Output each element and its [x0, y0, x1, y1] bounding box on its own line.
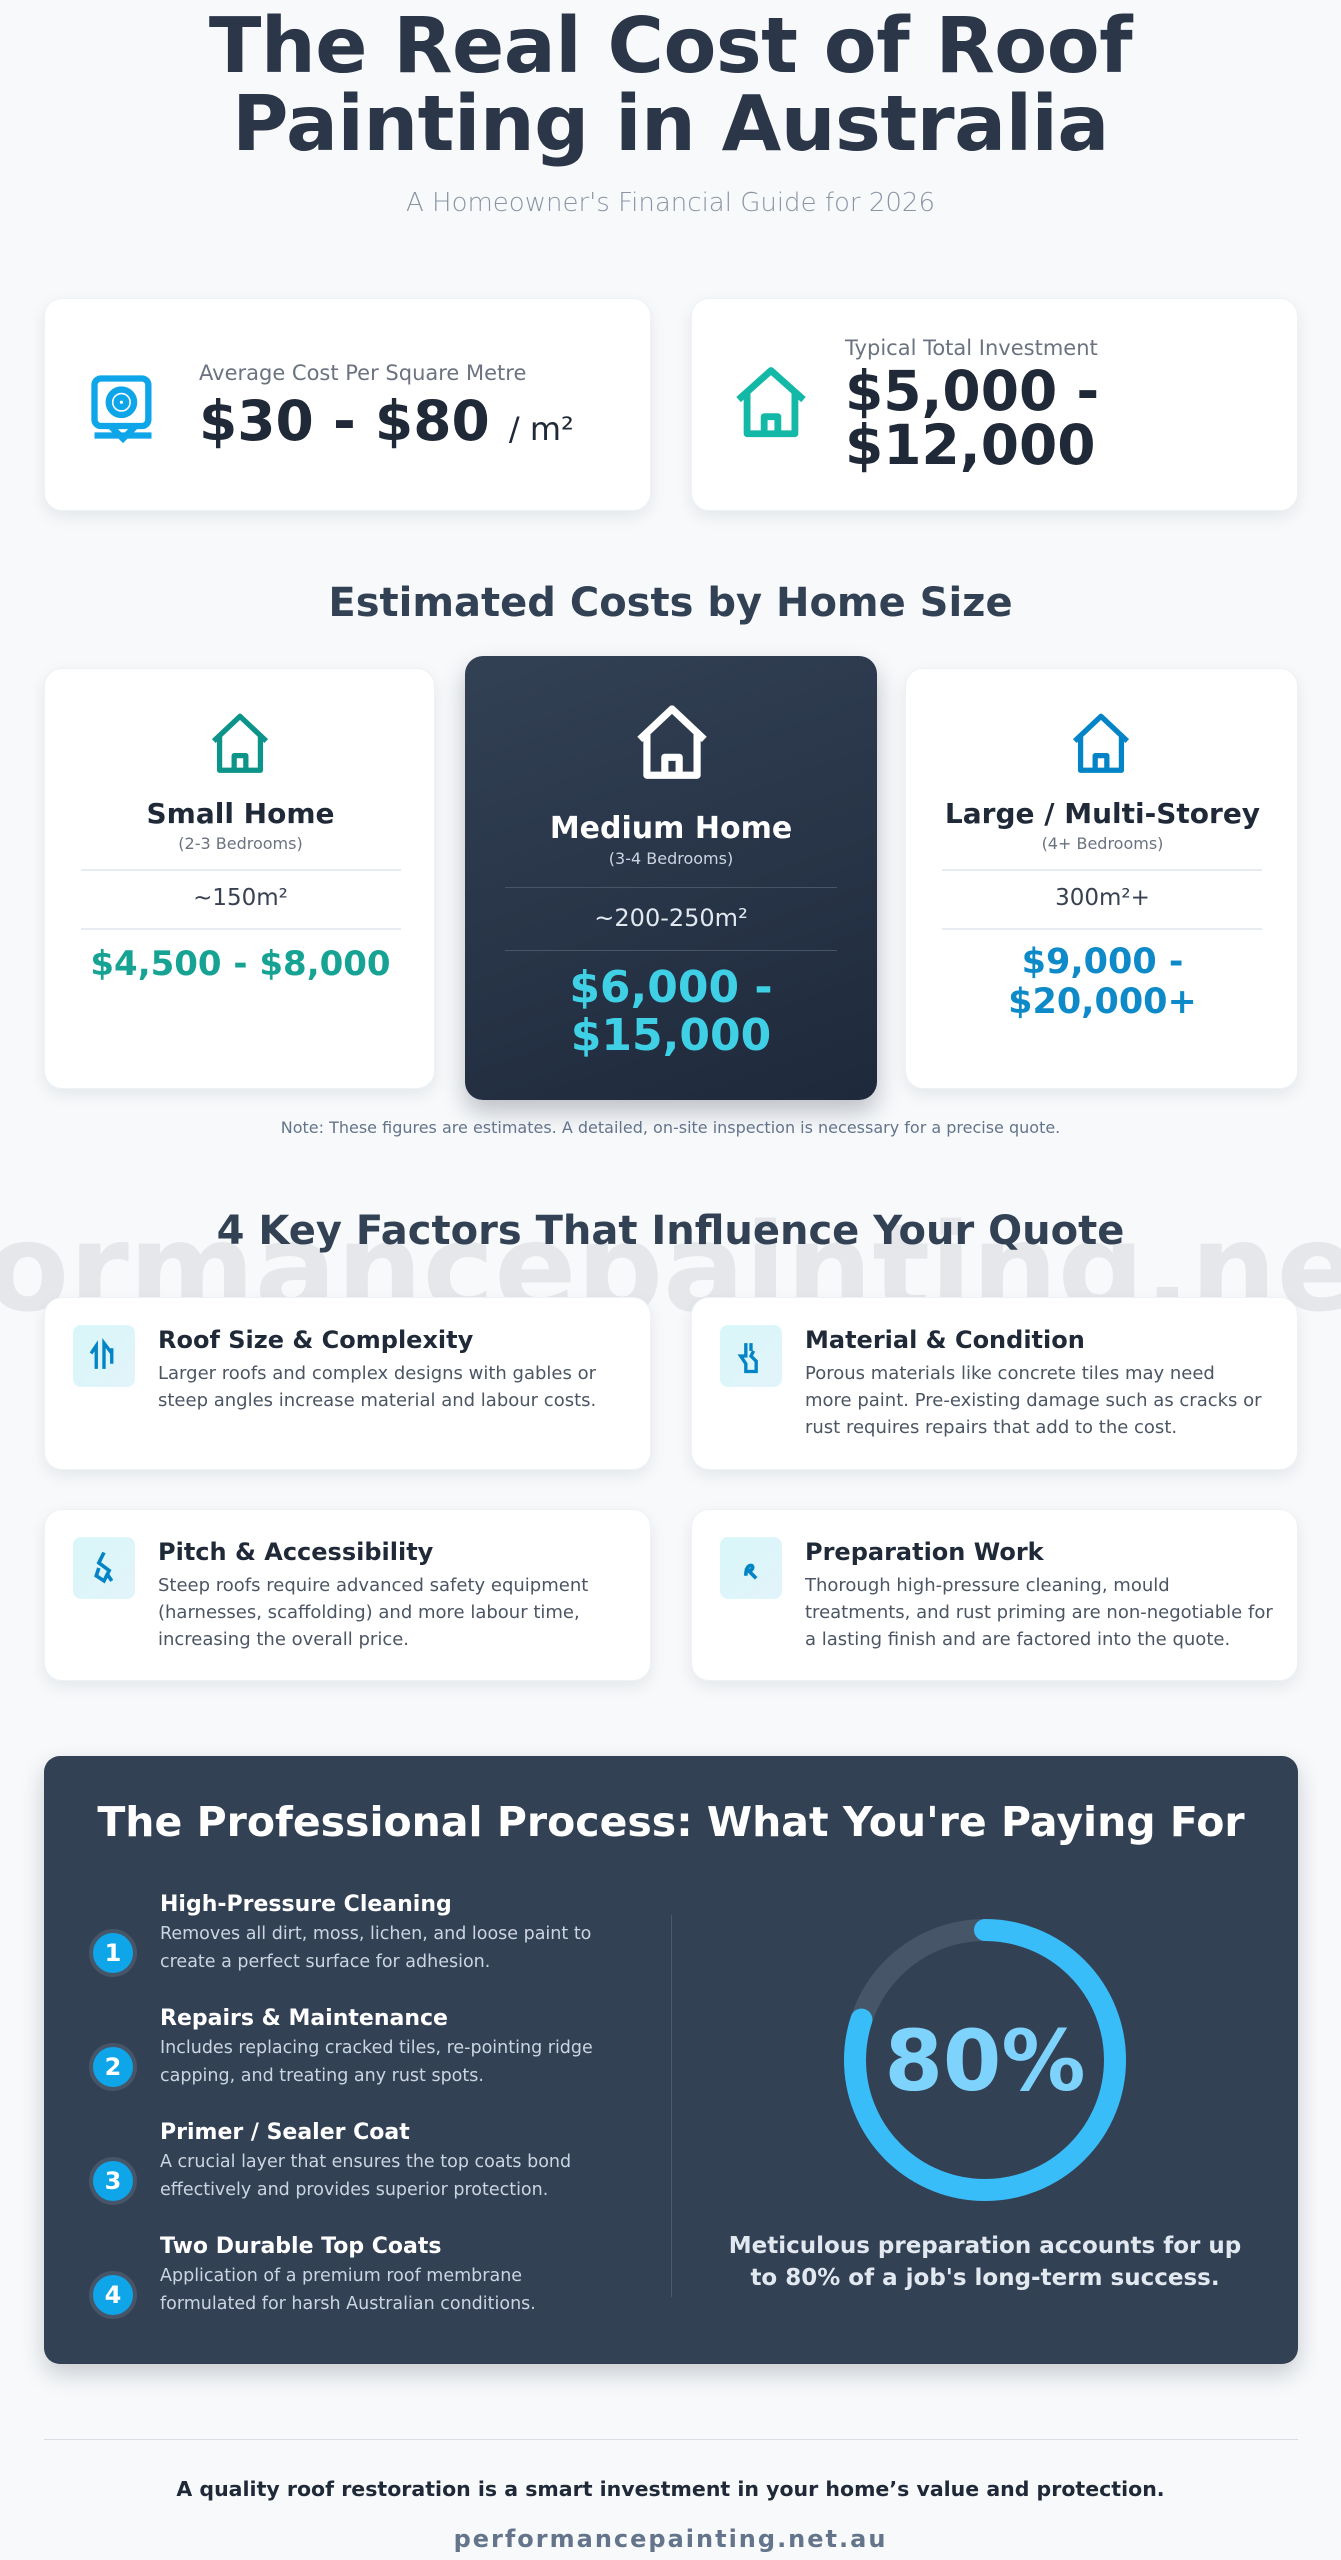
step 4: formulated for harsh Australian conditions.: [160, 2294, 536, 2314]
icon: [637, 705, 707, 779]
subtitle: A Homeowner's Financial Guide for 2026: [406, 188, 935, 218]
price: $4,500 - $8,000: [90, 944, 391, 984]
title: Small Home: [146, 797, 334, 830]
title: The Real Cost of Roof: [209, 2, 1132, 91]
card: large home: [905, 668, 1298, 1089]
label: Typical Total Investment: [845, 336, 1098, 360]
heading: estimated costs: Estimated Costs by Home Size: [328, 580, 1013, 626]
step 4: 4: [105, 2281, 121, 2309]
factor: roof size: Larger roofs and complex designs with gables or steep angles increase material and labour costs.: [158, 1363, 596, 1411]
icon: house: [736, 367, 806, 438]
step 3: effectively and provides superior protection.: [160, 2180, 548, 2200]
caption: to 80% of a job's long-term success.: [750, 2265, 1220, 2291]
caption: Meticulous preparation accounts for up: [729, 2233, 1241, 2259]
factor: preparation: treatments, and rust priming are non-negotiable for a lasting finish and are factored into the quote.: [805, 1602, 1273, 1650]
step 1: High-Pressure Cleaning: [160, 1892, 452, 1917]
step 2: 2: [105, 2053, 121, 2081]
stat card: cost per m2: [44, 298, 651, 511]
step 3: [89, 2120, 571, 2205]
factor: preparation: Preparation Work: [805, 1538, 1044, 1566]
price: [569, 962, 773, 1061]
price: $6,000 -: [569, 962, 773, 1013]
card: medium home: ~200-250m²: [594, 904, 748, 932]
step 2: [89, 2006, 593, 2091]
value: $5,000 -: [845, 359, 1099, 423]
factor: material: Material & Condition: [805, 1326, 1085, 1354]
label: Average Cost Per Square Metre: [199, 361, 526, 385]
title: [209, 2, 1134, 169]
note: Note: These figures are estimates. A detailed, on-site inspection is necessary for a precise quote.: [281, 1118, 1060, 1137]
step 1: Removes all dirt, moss, lichen, and loose paint to: [160, 1924, 591, 1944]
footer tagline: A quality roof restoration is a smart investment in your home’s value and protection.: [176, 2477, 1165, 2501]
process title: The Professional Process: What You're Paying For: [97, 1798, 1245, 1846]
step 1: 1: [105, 1939, 121, 1967]
factor: pitch: [44, 1509, 651, 1681]
factor: preparation: [691, 1509, 1298, 1681]
step 4: [89, 2234, 536, 2319]
factor: roof size: [44, 1297, 651, 1470]
title: Medium Home: [550, 811, 792, 846]
card: large home: (4+ Bedrooms): [1042, 834, 1163, 853]
icon: [1073, 714, 1129, 773]
step 4: Two Durable Top Coats: [160, 2234, 442, 2259]
card: medium home: (3-4 Bedrooms): [609, 849, 733, 868]
factor: pitch: Steep roofs require advanced safety equipment (harnesses, scaffolding) and more labour time, increasing the overall price.: [158, 1575, 588, 1650]
stat card: total investment: [691, 298, 1298, 511]
value: [845, 359, 1099, 477]
factor: pitch: Pitch & Accessibility: [158, 1538, 433, 1566]
factor: material: [691, 1297, 1298, 1470]
icon: [212, 714, 268, 773]
value: $30 - $80 / m²: [199, 389, 574, 453]
chart: 80% ring: [844, 1919, 1126, 2201]
card: small home: (2-3 Bedrooms): [178, 834, 303, 853]
price: $15,000: [571, 1010, 771, 1061]
step 4: Application of a premium roof membrane: [160, 2266, 522, 2286]
step 1: create a perfect surface for adhesion.: [160, 1952, 490, 1972]
step 2: capping, and treating any rust spots.: [160, 2066, 484, 2086]
step 3: Primer / Sealer Coat: [160, 2120, 410, 2145]
heading: key factors: 4 Key Factors That Influence Your Quote: [217, 1208, 1124, 1254]
step 3: A crucial layer that ensures the top coats bond: [160, 2152, 571, 2172]
title: Large / Multi-Storey: [945, 797, 1260, 830]
factor: material: more paint. Pre-existing damage such as cracks or rust requires repairs that add to the cost.: [805, 1390, 1262, 1438]
card: small home: ~150m²: [193, 885, 288, 911]
price: $9,000 -: [1022, 942, 1183, 982]
factor: roof size: Roof Size & Complexity: [158, 1326, 473, 1354]
price: $20,000+: [1008, 982, 1197, 1022]
panel: professional process: [44, 1756, 1298, 2364]
card: large home: 300m²+: [1055, 885, 1150, 911]
footer url: performancepainting.net.au: [454, 2525, 887, 2553]
factor: preparation: Thorough high-pressure cleaning, mould: [805, 1575, 1170, 1596]
value: $12,000: [845, 413, 1096, 477]
step 2: Repairs & Maintenance: [160, 2006, 448, 2031]
title: Painting in Australia: [232, 80, 1109, 169]
caption: [729, 2233, 1241, 2291]
price: [1008, 942, 1197, 1022]
icon: measure: [91, 375, 152, 443]
step 3: 3: [105, 2167, 121, 2195]
step 2: Includes replacing cracked tiles, re-pointing ridge: [160, 2038, 593, 2058]
chart: 80% ring: 80%: [884, 2012, 1086, 2110]
step 1: [89, 1892, 591, 1977]
card: small home: [44, 668, 435, 1089]
factor: material: Porous materials like concrete tiles may need: [805, 1363, 1215, 1384]
card: medium home: [465, 656, 877, 1100]
